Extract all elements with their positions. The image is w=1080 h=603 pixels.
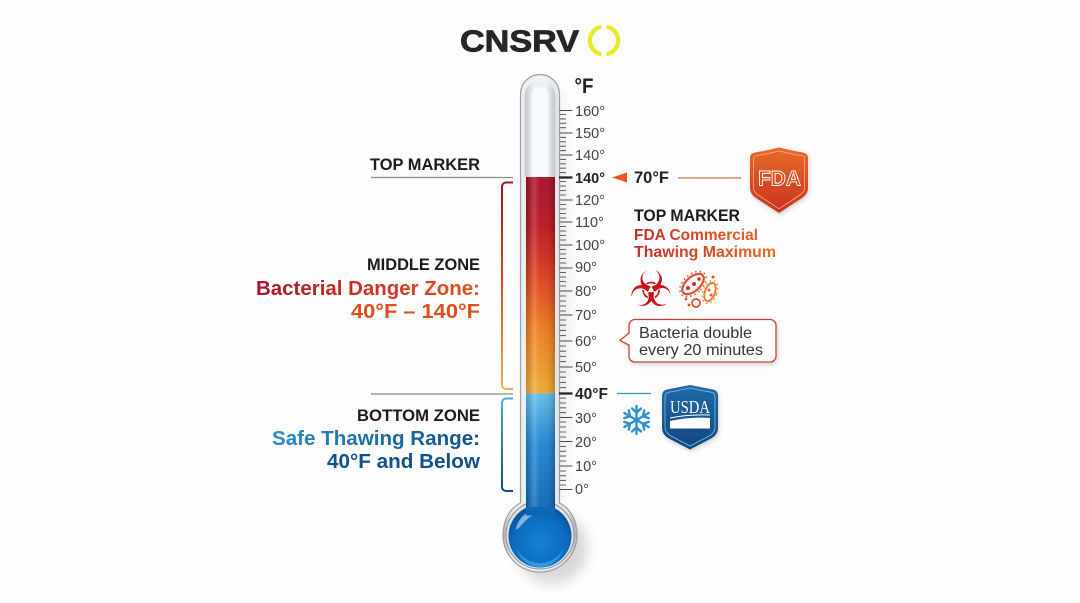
scale labels: 60°: [575, 334, 597, 350]
icon: bacteria: [675, 267, 721, 307]
left label: bottom zone: BOTTOM ZONE: [357, 407, 480, 425]
liquid column: [526, 177, 555, 394]
40F marker line: [371, 393, 513, 395]
scale labels: 80°: [575, 284, 597, 300]
left label: middle zone: 40°F – 140°F: [351, 300, 480, 323]
bulb: [506, 501, 574, 569]
right text: top marker: [634, 207, 776, 261]
left label: middle zone: [256, 256, 480, 323]
label: 70F: 70°F: [634, 169, 669, 187]
scale labels: [574, 75, 608, 498]
bracket: safe zone: [502, 398, 513, 491]
top marker line: [371, 176, 513, 178]
icon: biohazard: ☣: [629, 261, 673, 318]
connector to FDA: [678, 177, 741, 179]
bracket: danger zone: [502, 182, 513, 389]
callout: bacteria double: [620, 320, 776, 362]
icon: FDA shield: [750, 148, 808, 213]
right text: top marker: FDA Commercial: [634, 227, 758, 244]
connector to USDA: [617, 392, 651, 394]
thermometer: [503, 74, 588, 584]
icon: USDA shield: [662, 385, 718, 450]
scale labels: 30°: [575, 411, 597, 427]
left label: bottom zone: Safe Thawing Range:: [272, 427, 480, 450]
scale labels: 90°: [575, 260, 597, 276]
scale ticks: [560, 110, 572, 490]
callout: bacteria double: every 20 minutes: [639, 342, 763, 359]
left label: bottom zone: 40°F and Below: [327, 450, 480, 473]
icon: logo ring: [590, 27, 618, 54]
left label: bottom zone: [272, 407, 480, 473]
icon: FDA shield: FDA: [758, 168, 801, 190]
left label: middle zone: Bacterial Danger Zone:: [256, 277, 480, 300]
arrow: 70F marker: [612, 172, 627, 182]
icon: snowflake: [622, 406, 651, 434]
callout: bacteria double: Bacteria double: [639, 325, 752, 342]
logo: CNSRV: [460, 24, 618, 58]
scale labels: 140°: [575, 148, 605, 164]
scale labels: 70°: [575, 308, 597, 324]
scale labels: °F: [574, 75, 594, 98]
left label: top marker: TOP MARKER: [370, 156, 480, 174]
scale labels: 110°: [575, 215, 604, 231]
icon: USDA shield: USDA: [670, 397, 710, 417]
scale labels: 50°: [575, 360, 597, 376]
scale labels: 40°F: [575, 386, 608, 403]
scale labels: 20°: [575, 435, 597, 451]
scale labels: 140°: [575, 171, 605, 187]
glass tube: [503, 74, 577, 572]
scale labels: 10°: [575, 459, 597, 475]
right text: top marker: TOP MARKER: [634, 207, 740, 225]
left label: middle zone: MIDDLE ZONE: [367, 256, 480, 274]
right text: top marker: Thawing Maximum: [634, 244, 776, 261]
logo: CNSRV: CNSRV: [460, 24, 579, 58]
scale labels: 160°: [575, 104, 605, 120]
scale labels: 120°: [575, 193, 605, 209]
scale labels: 0°: [575, 482, 589, 498]
scale labels: 150°: [575, 126, 605, 142]
scale labels: 100°: [575, 238, 605, 254]
